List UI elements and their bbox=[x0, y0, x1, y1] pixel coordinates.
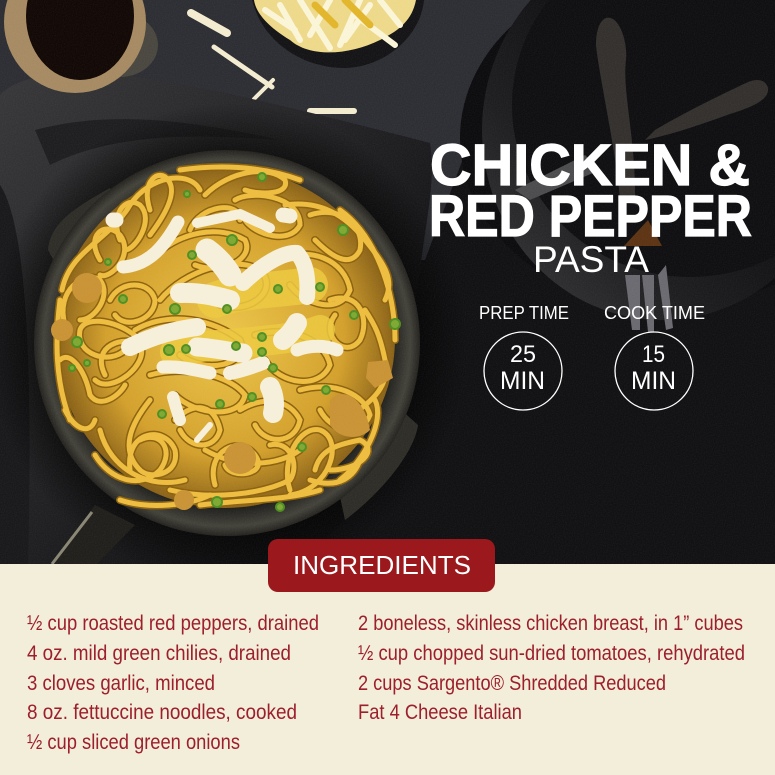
melted cheese bbox=[113, 214, 337, 440]
prep time: PREP TIME bbox=[479, 303, 569, 323]
loose cheese shreds bbox=[191, 13, 354, 111]
noodles bbox=[57, 167, 395, 505]
ingredients panel bbox=[0, 564, 775, 775]
skillet body bbox=[34, 150, 420, 536]
shadow around the skillet bbox=[0, 103, 467, 583]
cook time bbox=[604, 303, 705, 410]
ingredients list: right column bbox=[358, 612, 745, 724]
fork head left bbox=[515, 155, 600, 200]
ingredients list: left column bbox=[27, 612, 319, 754]
ingredients list: right column: 2 cups Sargento® Shredded Reduced bbox=[358, 672, 666, 695]
photo background: dark table bbox=[0, 0, 775, 565]
prep time: 25 bbox=[510, 341, 536, 368]
title: CHICKEN & bbox=[430, 133, 750, 198]
title: PASTA bbox=[533, 239, 649, 280]
fork handle right bbox=[645, 80, 768, 140]
ingredients list: left column: 8 oz. fettuccine noodles, cooked bbox=[27, 701, 297, 724]
photo grain overlay bbox=[0, 0, 775, 565]
black plates and forks bbox=[460, 0, 775, 332]
ingredients list: left column: 4 oz. mild green chilies, drained bbox=[27, 642, 291, 665]
green onions bbox=[69, 173, 400, 511]
cup of sauce and saucer bbox=[4, 0, 158, 93]
cook time: 15 bbox=[642, 341, 665, 368]
chicken pieces bbox=[51, 273, 393, 510]
fork tines lower bbox=[625, 265, 673, 332]
prep time: MIN bbox=[500, 367, 545, 395]
tomato chunk bbox=[624, 220, 662, 246]
skillet spouts bbox=[48, 188, 418, 520]
cook time: MIN bbox=[631, 367, 676, 395]
title bbox=[429, 133, 752, 280]
skillet of pasta bbox=[34, 150, 420, 566]
ingredients list: left column: ½ cup sliced green onions bbox=[27, 731, 240, 754]
ingredients heading badge: INGREDIENTS bbox=[293, 550, 471, 580]
skillet handle bbox=[50, 505, 135, 566]
prep time bbox=[479, 303, 569, 410]
ingredients list: left column: ½ cup roasted red peppers, drained bbox=[27, 612, 319, 635]
ingredients list: right column: Fat 4 Cheese Italian bbox=[358, 701, 522, 724]
pasta mound bbox=[55, 168, 395, 508]
ingredients list: left column: 3 cloves garlic, minced bbox=[27, 672, 215, 695]
fork handle upper bbox=[596, 18, 640, 206]
dark cloth bbox=[0, 73, 432, 565]
bowl of shredded cheese bbox=[252, 0, 424, 68]
ingredients heading badge bbox=[268, 539, 495, 592]
cook time: COOK TIME bbox=[604, 303, 705, 323]
